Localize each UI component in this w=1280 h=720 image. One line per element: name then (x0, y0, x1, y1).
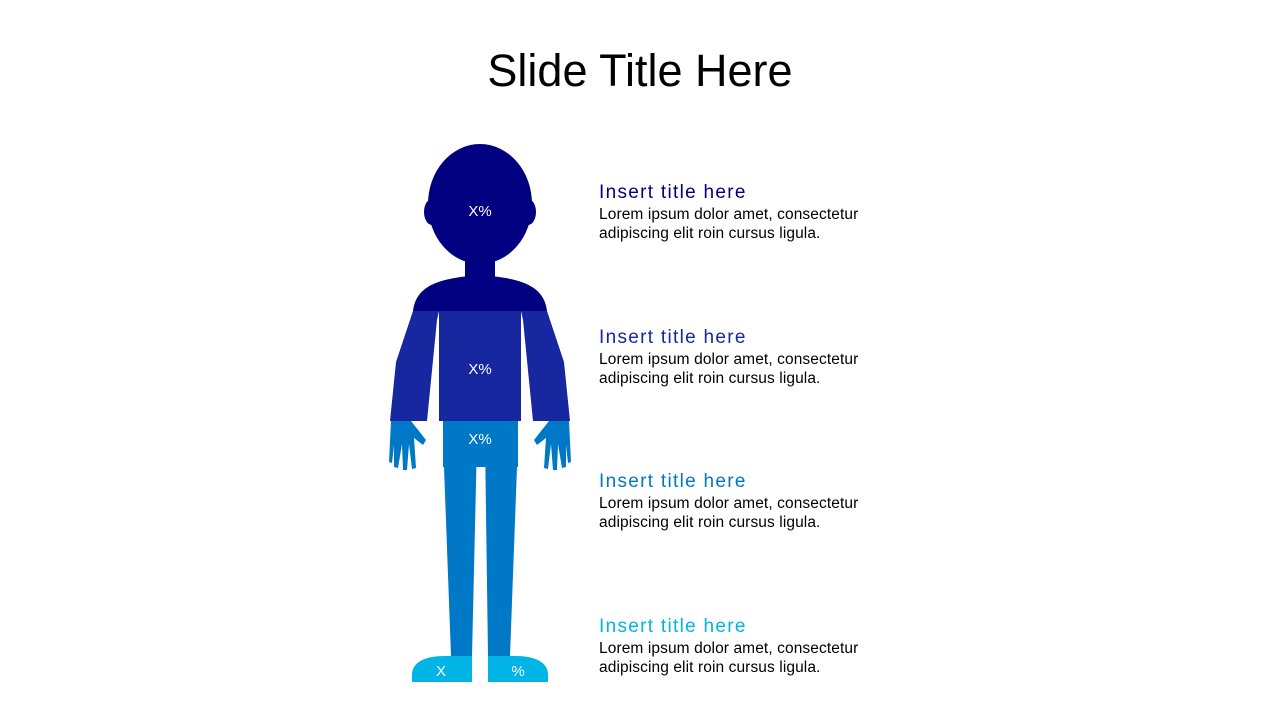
torso and arms: X% (468, 361, 492, 378)
text block 4 (599, 616, 858, 676)
text block 1: Lorem ipsum dolor amet, consectetur adipiscing elit roin cursus ligula. (599, 206, 858, 242)
text block 4: Lorem ipsum dolor amet, consectetur adipiscing elit roin cursus ligula. (599, 640, 858, 676)
text block 3: Insert title here (599, 471, 747, 492)
feet (412, 656, 548, 682)
text block 4: Insert title here (599, 616, 747, 637)
text block 3 (599, 471, 858, 531)
hips, legs and hands (389, 421, 571, 656)
head and shoulders: X% (468, 203, 492, 220)
feet: % (511, 663, 525, 680)
text block 1 (599, 182, 858, 242)
text block 3: Lorem ipsum dolor amet, consectetur adipiscing elit roin cursus ligula. (599, 495, 858, 531)
feet: X (436, 663, 446, 680)
title: Slide Title Here (487, 45, 793, 96)
text block 2: Insert title here (599, 327, 747, 348)
text block 1: Insert title here (599, 182, 747, 203)
text block 2: Lorem ipsum dolor amet, consectetur adipiscing elit roin cursus ligula. (599, 351, 858, 387)
head and shoulders (413, 144, 547, 311)
torso and arms (390, 311, 570, 421)
hips, legs and hands: X% (468, 431, 492, 448)
text block 2 (599, 327, 858, 387)
